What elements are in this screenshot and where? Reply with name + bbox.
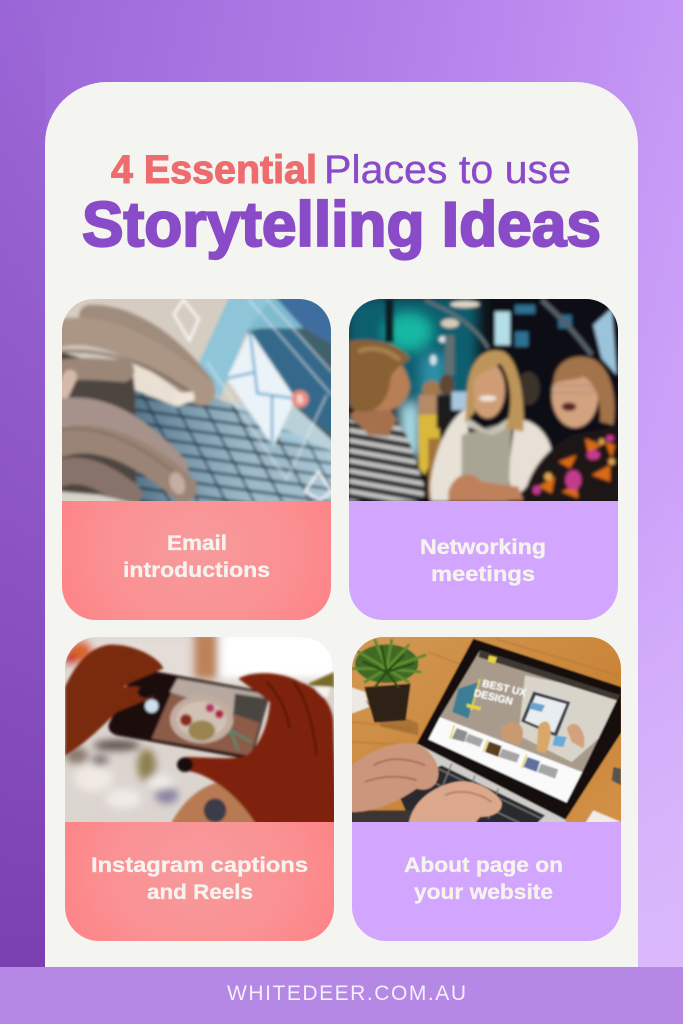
photo: three women talking [349,299,618,501]
label: networking meetings: Networking [420,536,546,559]
photo: laptop showing website [352,637,621,822]
photo: hands holding phone photographing food [65,637,334,822]
label: networking meetings [349,501,618,620]
label: instagram captions and reels [65,822,334,941]
card: instagram captions and reels [65,637,334,941]
label: email introductions: Email [167,532,227,555]
label: networking meetings: meetings [431,563,535,586]
photo: hands typing with email icon [62,299,331,501]
card: email introductions [62,299,331,620]
photo: hands typing with email icon: 5 [297,394,303,406]
photo: laptop showing website: DESIGN [473,688,514,708]
title: Places to use [324,148,571,192]
label: about page on your website [352,822,621,941]
footer band with website [0,967,683,1024]
label: email introductions: introductions [123,559,270,582]
title: Storytelling Ideas [82,190,601,260]
card: about page on your website [352,637,621,941]
label: instagram captions and reels: and Reels [147,881,253,904]
title [82,148,601,261]
right background shading [638,0,683,970]
label: about page on your website: About page on [404,854,563,877]
left background shading [0,0,45,970]
label: about page on your website: your website [414,881,553,904]
main panel [45,82,638,967]
photo: laptop showing website: BEST UX [481,679,527,699]
footer band with website: WHITEDEER.COM.AU [227,982,466,1005]
label: instagram captions and reels: Instagram captions [91,854,308,877]
title: 4 Essential [111,148,317,192]
card: networking meetings [349,299,618,620]
label: email introductions [62,501,331,620]
